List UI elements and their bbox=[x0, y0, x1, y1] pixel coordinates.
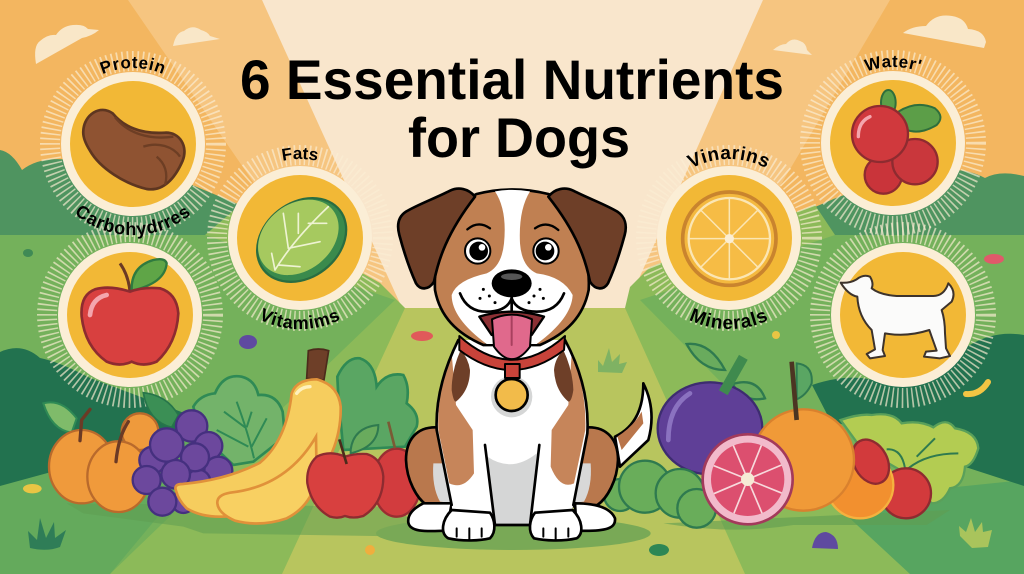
nutrient label: vitamins (left lower): Vitamims bbox=[262, 308, 340, 330]
apple back bbox=[373, 449, 421, 517]
bit: purple grape bbox=[239, 335, 257, 349]
cream ring bbox=[831, 243, 975, 387]
background: lighter sun ray bands bbox=[128, 0, 890, 320]
nutrient badge: fats bbox=[207, 145, 386, 331]
icon: berries bbox=[852, 90, 940, 194]
orange right bbox=[87, 441, 149, 512]
leaf left bbox=[43, 402, 77, 433]
left ear bbox=[398, 189, 475, 288]
icon: apple bbox=[81, 259, 178, 364]
hind leg right bbox=[567, 427, 618, 507]
bit: yellow bbox=[772, 331, 780, 339]
ground shadow bbox=[376, 517, 651, 550]
cloud left large bbox=[35, 25, 99, 64]
orange bbox=[753, 409, 854, 511]
stray dots bbox=[23, 484, 42, 493]
cream ring bbox=[58, 243, 202, 387]
cloud right small bbox=[773, 40, 812, 55]
banana stem bbox=[307, 349, 329, 380]
head bbox=[435, 189, 589, 345]
scattered food bits bbox=[23, 249, 1004, 556]
right eyebrow bbox=[535, 225, 558, 230]
apple stem back bbox=[388, 422, 395, 448]
nutrient badge: protein bbox=[40, 51, 226, 237]
title line 1: 6 Essential Nutrients bbox=[240, 48, 784, 111]
food group: right bbox=[604, 344, 978, 530]
plum highlight bbox=[668, 393, 690, 440]
label: Minerals: Minerals bbox=[690, 308, 767, 330]
foreground dark hill right bbox=[812, 334, 1024, 486]
orange leaf bbox=[797, 363, 812, 399]
plum leaf lower bbox=[733, 382, 765, 399]
body brown patch left bbox=[438, 353, 474, 485]
gold disc bbox=[840, 252, 966, 378]
dog bbox=[376, 189, 652, 550]
grapes bbox=[133, 410, 232, 516]
nose bbox=[492, 269, 532, 310]
bit: yellow squiggle bbox=[966, 382, 988, 394]
gold disc bbox=[666, 175, 792, 301]
mouth bbox=[479, 312, 544, 335]
small grass tuft centre bbox=[598, 348, 627, 373]
orange stem bbox=[792, 362, 797, 420]
grass: side ray bands bbox=[0, 235, 1024, 574]
leaf centre bbox=[143, 393, 178, 427]
green peas bbox=[604, 461, 716, 528]
collar bbox=[459, 336, 565, 370]
body brown patch right bbox=[551, 353, 585, 485]
cream ring bbox=[228, 166, 372, 310]
right ear bbox=[548, 189, 626, 288]
icon: white dog bbox=[841, 276, 954, 358]
label: Vinarins: Vinarins bbox=[686, 146, 769, 167]
tongue line bbox=[509, 317, 515, 345]
right eye bbox=[533, 238, 559, 264]
gold disc bbox=[830, 80, 956, 206]
label: Carbohydrres: Carbohydrres bbox=[76, 206, 190, 239]
banana back bbox=[175, 379, 341, 517]
tail bbox=[615, 383, 652, 467]
small grass tuft left bbox=[28, 518, 66, 550]
sunburst rays bbox=[50, 61, 216, 227]
bit: green pebble bbox=[649, 544, 669, 556]
small grass tuft right bbox=[959, 518, 992, 548]
grass: centre yellow ray bbox=[282, 308, 745, 574]
label: Water: Water' bbox=[864, 56, 922, 71]
lettuce vein bbox=[887, 438, 958, 468]
icon: meat bbox=[83, 110, 184, 189]
plum leaf top bbox=[687, 344, 725, 370]
sunburst rays bbox=[646, 155, 812, 321]
sunburst rays bbox=[47, 232, 213, 398]
hind leg shade left bbox=[433, 463, 455, 503]
gold disc bbox=[237, 175, 363, 301]
banana front bbox=[217, 437, 317, 524]
background: cream centre ray bbox=[262, 0, 763, 310]
left eyebrow bbox=[467, 224, 490, 229]
red berry bbox=[845, 433, 896, 490]
smile bbox=[460, 293, 564, 312]
left eye bbox=[465, 238, 490, 264]
grass base bbox=[0, 205, 1024, 574]
grass: lower right band bbox=[830, 480, 1024, 574]
lettuce left bbox=[193, 376, 285, 465]
cream ring bbox=[657, 166, 801, 310]
nutrient badge: minerals (dog) bbox=[820, 232, 986, 398]
foreground dark hill left bbox=[0, 348, 230, 486]
banana highlight bbox=[297, 387, 310, 393]
tag bbox=[491, 364, 532, 417]
body fill bbox=[437, 340, 588, 525]
front paw right bbox=[530, 510, 581, 540]
orange slice behind bbox=[827, 452, 893, 518]
dark spot right bbox=[554, 350, 573, 402]
hills: back left bbox=[0, 150, 245, 242]
orange left bbox=[49, 430, 114, 503]
cloud left small bbox=[173, 27, 220, 46]
white blaze and muzzle bbox=[452, 190, 573, 344]
sunburst rays bbox=[810, 60, 976, 226]
whisker dots bbox=[480, 289, 543, 303]
sunburst rays bbox=[820, 232, 986, 398]
apple stem front bbox=[339, 439, 347, 464]
lettuce right bbox=[337, 358, 417, 450]
yellow-green lettuce bbox=[841, 414, 978, 503]
hind leg left bbox=[406, 427, 457, 507]
tomato bbox=[881, 468, 931, 518]
bit: red bbox=[411, 331, 433, 341]
cream ring bbox=[61, 72, 205, 216]
hind paw right bbox=[575, 503, 615, 531]
hills: back right bbox=[800, 170, 1024, 240]
cream ring bbox=[821, 71, 965, 215]
plum body bbox=[658, 382, 762, 474]
tongue bbox=[492, 315, 532, 359]
hind leg shade right bbox=[569, 463, 591, 503]
grapefruit slice bbox=[700, 432, 795, 527]
food group: left bbox=[23, 349, 421, 537]
title line 2: for Dogs bbox=[408, 106, 630, 169]
icon: leaf bbox=[241, 181, 363, 299]
ground shadow bbox=[67, 503, 420, 537]
gold disc bbox=[70, 81, 196, 207]
body outlines bbox=[437, 340, 588, 525]
front paw left bbox=[443, 510, 494, 540]
gold disc bbox=[67, 252, 193, 378]
bit: orange dots bbox=[365, 545, 375, 555]
orange back bbox=[122, 413, 158, 450]
icon: citrus slice bbox=[683, 192, 776, 285]
sunburst rays bbox=[217, 155, 383, 321]
leaf on apple bbox=[351, 425, 378, 453]
lettuce veins bbox=[217, 402, 267, 458]
bit: purple pebble bbox=[812, 532, 838, 549]
orange stems bbox=[80, 409, 128, 462]
label: Fats: Fats bbox=[282, 148, 318, 161]
bit: red right bbox=[984, 254, 1004, 264]
title bbox=[240, 48, 784, 169]
cloud right large bbox=[903, 15, 986, 48]
grass: lower left band bbox=[0, 430, 230, 574]
apple front bbox=[307, 453, 383, 518]
chest shade bbox=[487, 453, 537, 524]
label: Protein: Protein bbox=[100, 57, 164, 74]
nutrient badge: carbohydrates bbox=[37, 206, 223, 408]
nutrient badge: vitamins (orange) bbox=[642, 145, 822, 331]
dark spot left bbox=[452, 350, 470, 402]
nutrient badge: water bbox=[800, 50, 986, 236]
plum stem bbox=[723, 357, 743, 393]
hind paw left bbox=[408, 503, 452, 531]
bit: green dots bbox=[23, 249, 33, 257]
ground shadow bbox=[663, 510, 950, 530]
